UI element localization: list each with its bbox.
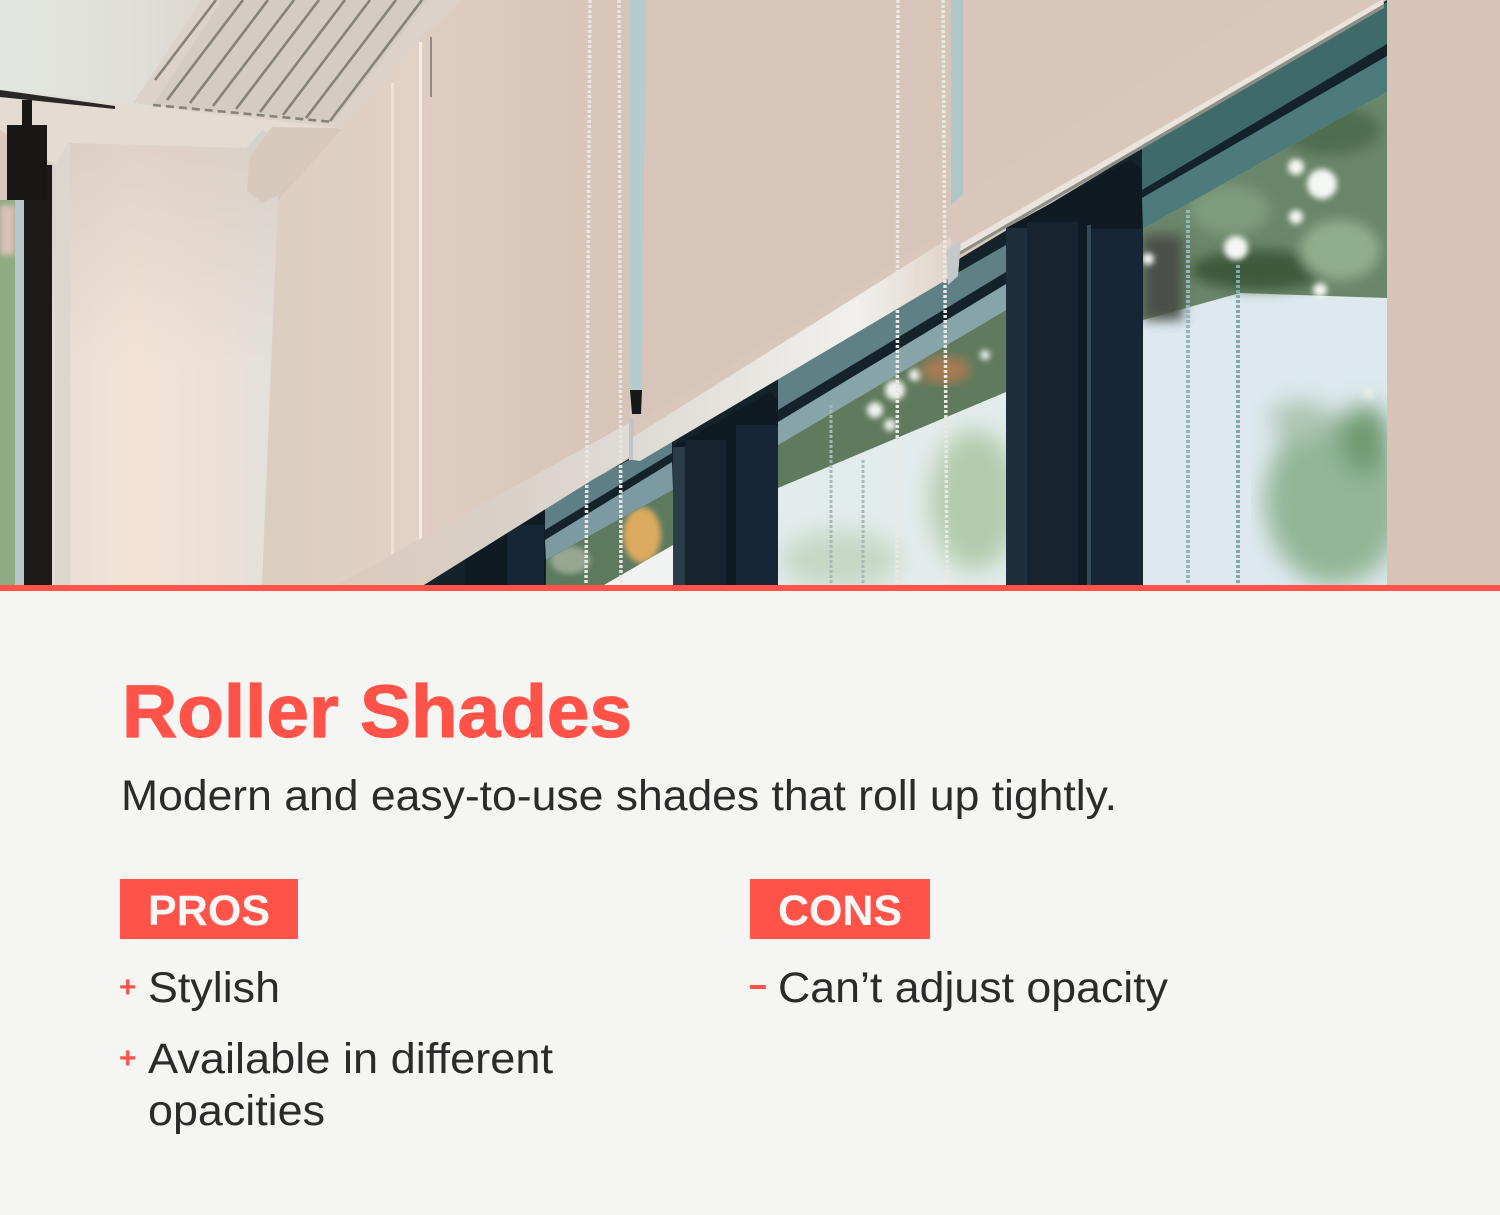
shade cassette tube: [245, 127, 340, 203]
shade bottom rail 1: [337, 423, 629, 585]
shade panel 1: [262, 40, 420, 585]
shade panel 3: [641, 0, 951, 420]
pros badge: [120, 879, 298, 939]
soffit below ceiling: [0, 90, 345, 165]
rail bracket: [946, 240, 961, 285]
title: Roller Shades: [122, 670, 632, 753]
wall column: [52, 120, 278, 585]
pro item: opacities: opacities: [148, 1087, 325, 1135]
track light: [0, 90, 115, 200]
air vent: [133, 0, 462, 128]
pro item: stylish: +: [119, 971, 137, 1004]
photo: roller shades over windows: [0, 0, 1500, 585]
right window glass and foliage: [1142, 90, 1405, 590]
left window glass and foliage: [546, 485, 674, 585]
subtitle: Modern and easy-to-use shades that roll up tightly.: [121, 772, 1117, 820]
cons badge: [750, 879, 930, 939]
shade seams: [391, 37, 432, 563]
ceiling: [0, 0, 462, 128]
cons column: [750, 879, 1169, 1012]
right wall column: [1387, 0, 1500, 585]
pro item: opacities: [119, 1035, 553, 1135]
dark mullions: [465, 160, 1142, 585]
pull chains: [586, 0, 1238, 585]
shade panel 4: [963, 0, 1273, 195]
left window and post: [0, 165, 52, 585]
window frame: [420, 0, 1387, 585]
pro item: opacities: +: [119, 1042, 137, 1075]
accent line: [0, 585, 1500, 591]
middle window glass and foliage: [778, 310, 1006, 585]
glass strip between shades: [629, 0, 646, 460]
con item: opacity: Can’t adjust opacity: [778, 964, 1169, 1012]
pros badge: PROS: [148, 887, 270, 935]
pro item: stylish: Stylish: [148, 964, 280, 1012]
shade bottom rail 2: [633, 237, 951, 461]
shade panel 2: [420, 0, 630, 560]
cons badge: CONS: [778, 887, 902, 935]
glass strip between shades 2: [951, 0, 964, 205]
shade bottom rail 3: [955, 0, 1384, 256]
pro item: opacities: Available in different: [148, 1035, 553, 1083]
pros column: [119, 879, 553, 1135]
